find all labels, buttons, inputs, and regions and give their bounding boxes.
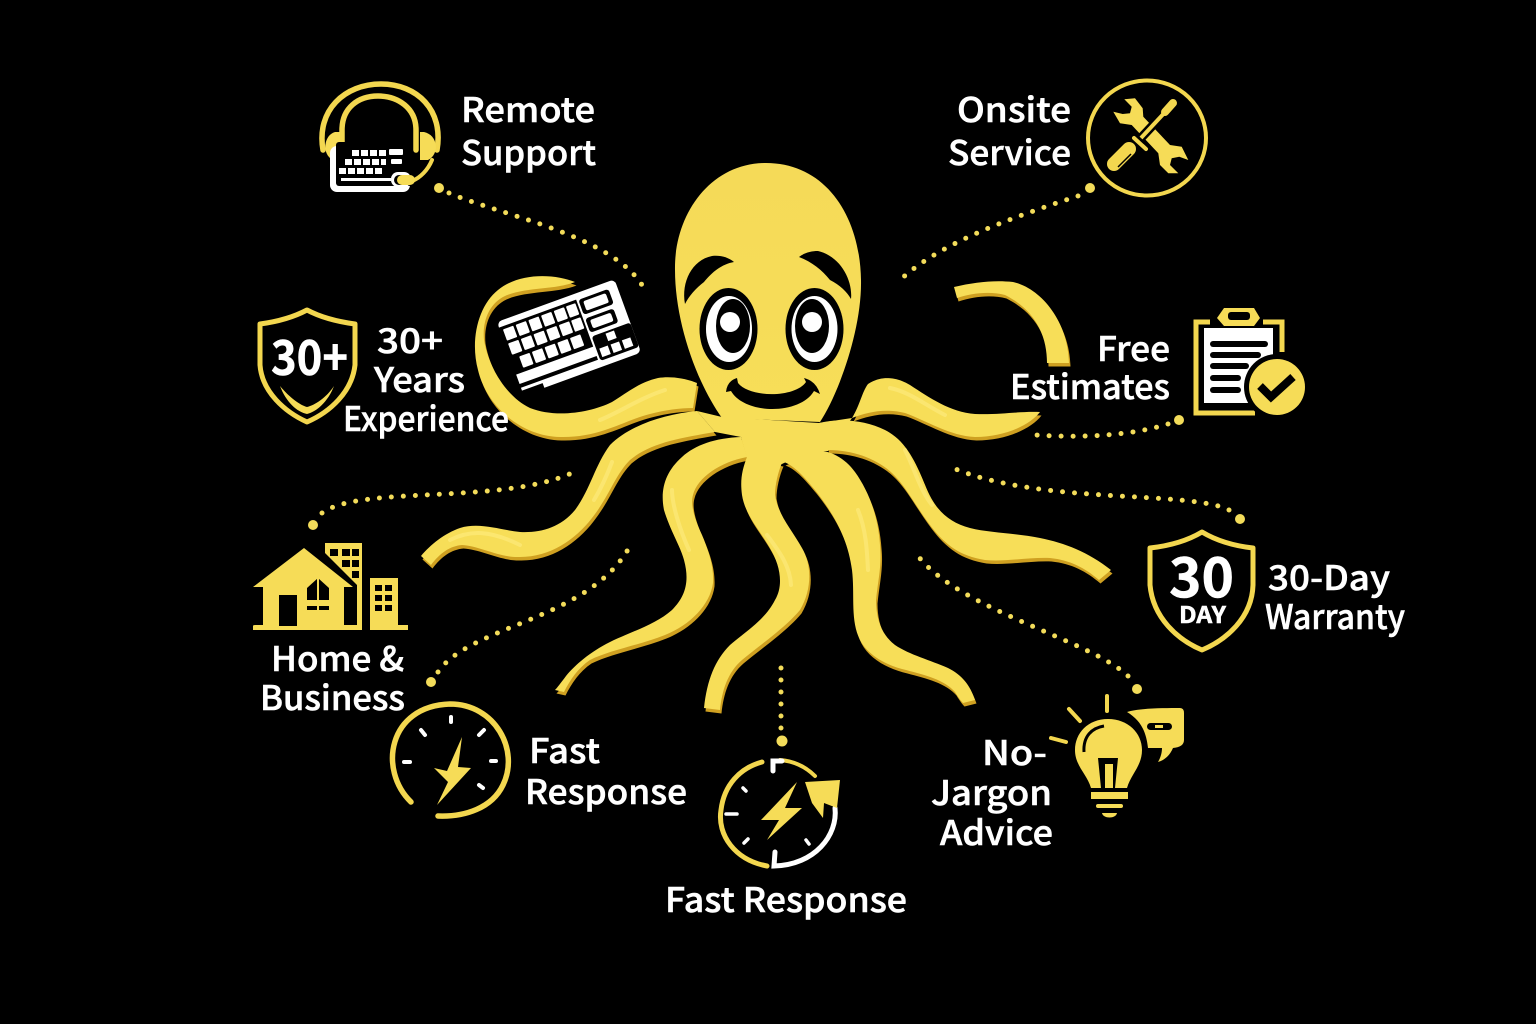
keyboard held by tentacle <box>489 279 641 399</box>
label: home and business <box>260 632 405 720</box>
label: remote support <box>461 83 596 175</box>
icon: 30 day shield: DAY <box>1179 596 1227 630</box>
tentacles <box>421 276 1111 710</box>
label: 30+ years experience: 30+ <box>377 314 443 363</box>
icon: home and business buildings <box>253 543 408 630</box>
tentacle shading <box>422 280 1112 714</box>
right eyebrow <box>799 251 851 299</box>
label: 30+ years experience: Experience <box>343 392 509 441</box>
icon: 30 day shield <box>1150 532 1253 650</box>
label: 30+ years experience: Years <box>373 353 465 402</box>
right eye <box>786 288 844 370</box>
icon: fast response clock with bubble <box>720 760 840 866</box>
label: fast response left <box>525 724 687 814</box>
label: free estimates: Free <box>1097 322 1170 371</box>
icon: clipboard with check <box>1196 308 1310 420</box>
icon: remote support headset with keyboard <box>322 84 438 192</box>
connector dots: fast response left <box>426 546 630 687</box>
label: free estimates <box>1010 322 1170 409</box>
label: no-jargon advice: Jargon <box>931 766 1052 815</box>
label: free estimates: Estimates <box>1010 360 1170 409</box>
label: home and business: Business <box>260 671 405 720</box>
label: fast response left: Response <box>525 765 687 814</box>
label: 30-day warranty <box>1265 551 1405 639</box>
label: fast response left: Fast <box>529 724 600 773</box>
connector dots: onsite service <box>897 183 1095 283</box>
label: onsite service: Onsite <box>957 83 1071 132</box>
label: fast response centre: Fast Response <box>665 873 907 922</box>
label: 30-day warranty: 30-Day <box>1268 551 1391 600</box>
connector dots: no-jargon advice <box>918 556 1142 694</box>
connector dots: home and business <box>308 473 572 530</box>
label: remote support: Support <box>461 126 596 175</box>
icon: fast response speedometer <box>392 704 508 816</box>
icon: 30 day shield: 30 <box>1169 533 1234 613</box>
label: onsite service <box>948 83 1071 175</box>
connector dots: free estimates <box>1036 415 1184 436</box>
smile <box>726 378 820 409</box>
icon: 30+ shield <box>260 310 355 422</box>
connector dots: remote support <box>434 183 642 285</box>
left eyebrow <box>684 256 734 304</box>
head <box>675 163 861 422</box>
icon: wrench and screwdriver <box>1088 80 1206 196</box>
left eye <box>700 288 758 370</box>
label: 30-day warranty: Warranty <box>1265 590 1405 639</box>
label: no-jargon advice <box>931 726 1053 855</box>
label: 30+ years experience <box>343 314 509 441</box>
label: no-jargon advice: Advice <box>940 806 1053 855</box>
connector dots: warranty <box>953 468 1245 524</box>
icon: 30+ shield: 30+ <box>271 319 348 389</box>
body junction <box>697 411 852 464</box>
label: onsite service: Service <box>948 126 1071 175</box>
icon: lightbulb and speech bubble <box>1051 696 1184 818</box>
label: home and business: Home & <box>271 632 404 681</box>
octopus mascot <box>421 163 1112 714</box>
connector dots: fast response centre <box>776 660 788 746</box>
label: no-jargon advice: No- <box>982 726 1047 775</box>
label: remote support: Remote <box>461 83 595 132</box>
tentacle highlights <box>450 388 945 585</box>
